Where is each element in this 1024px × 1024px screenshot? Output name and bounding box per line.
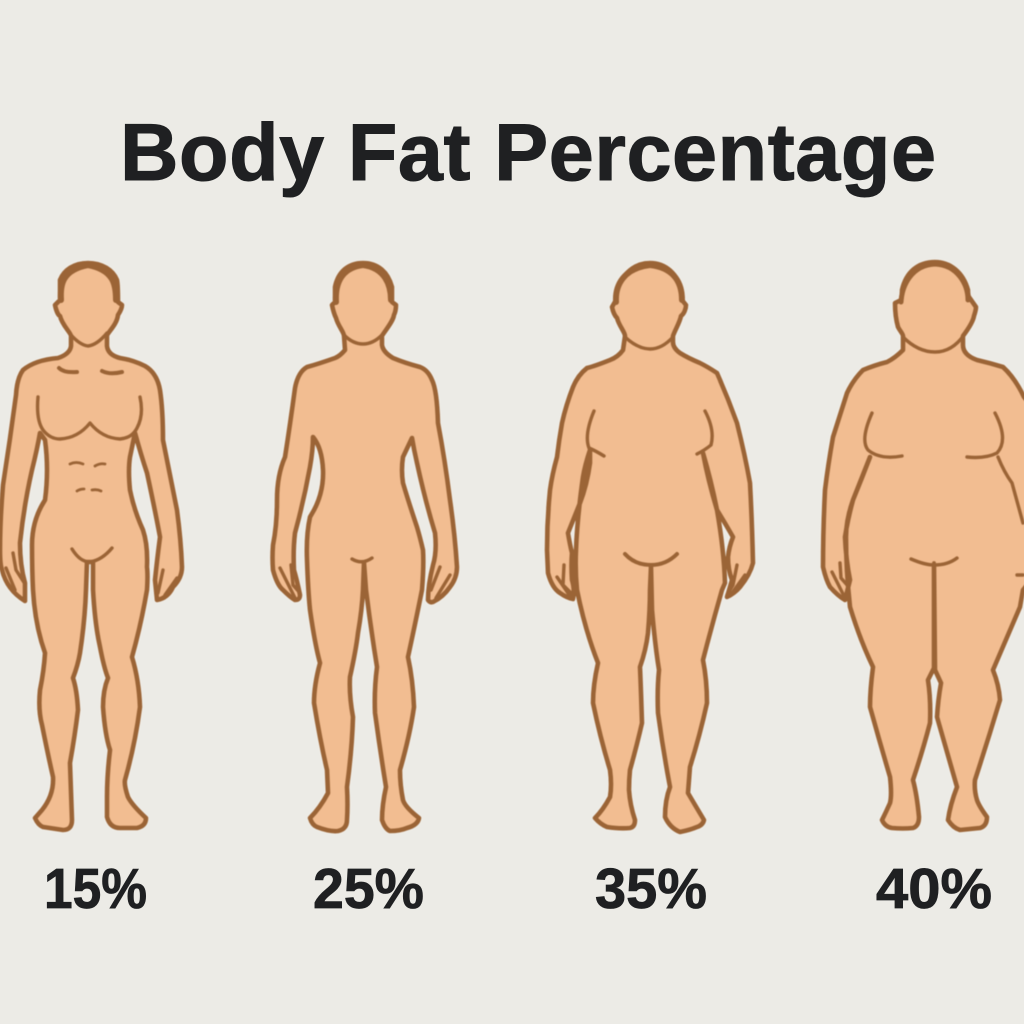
body outline [0, 263, 182, 830]
figure: 15% body fat [0, 263, 182, 830]
hair [336, 265, 391, 302]
collarbones [59, 368, 122, 373]
title: Body Fat Percentage [120, 108, 936, 198]
groin [352, 558, 372, 562]
label: 40%: 40% [876, 857, 992, 921]
jaw [625, 337, 673, 349]
fingers [6, 553, 177, 595]
fingers [280, 565, 450, 598]
jaw [71, 333, 107, 346]
chest folds [865, 413, 1003, 458]
label: 25%: 25% [313, 857, 424, 921]
jaw [903, 335, 964, 352]
label: 35%: 35% [595, 857, 707, 921]
groin [625, 554, 677, 565]
body outline [547, 263, 753, 832]
inner thigh [932, 563, 936, 668]
jaw [344, 335, 382, 344]
abdominal marks [70, 462, 105, 491]
fingers [832, 563, 848, 598]
groin [72, 548, 112, 562]
right arm inner [998, 457, 1023, 575]
fingers [557, 565, 745, 596]
figure: 35% body fat [547, 263, 753, 832]
hair [616, 265, 682, 302]
chest [38, 397, 141, 439]
groin [911, 558, 957, 565]
label: 15%: 15% [44, 857, 147, 921]
body outline [272, 263, 457, 831]
hair [901, 264, 968, 302]
hair line [61, 265, 116, 300]
figure: 40% body fat [823, 262, 1024, 830]
chest folds [587, 411, 712, 456]
body outline [823, 262, 1024, 830]
figure: 25% body fat [272, 263, 457, 831]
